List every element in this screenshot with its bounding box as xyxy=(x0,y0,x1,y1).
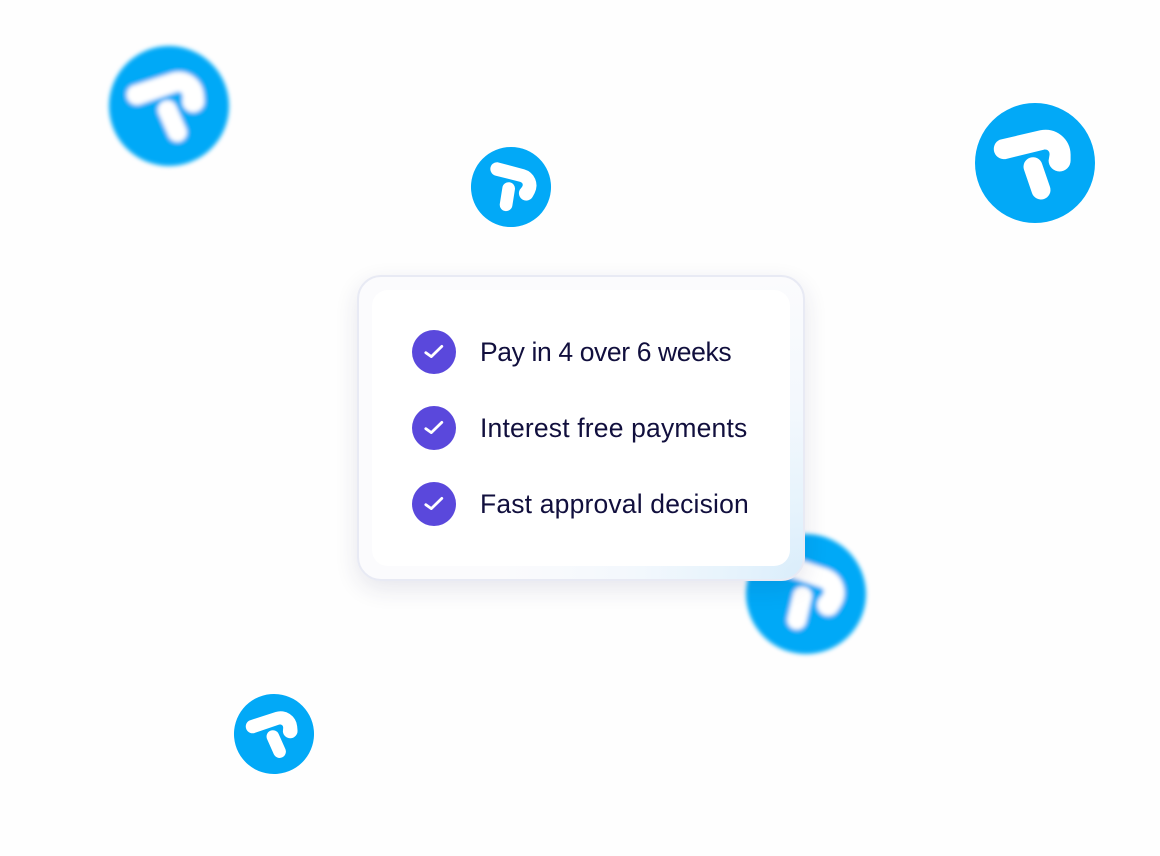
icon: small logo bottom left xyxy=(231,691,317,777)
icon: check badge xyxy=(412,330,456,374)
icon: check badge xyxy=(412,406,456,450)
panel: benefits card xyxy=(357,275,805,581)
icon: sharp logo top right xyxy=(975,103,1095,223)
list item: fast approval xyxy=(412,482,749,526)
list item: fast approval: Fast approval decision xyxy=(480,489,749,519)
icon: small logo top centre xyxy=(457,133,565,241)
list item: pay in 4: Pay in 4 over 6 weeks xyxy=(480,337,731,367)
list item: interest free xyxy=(412,406,747,450)
icon: blurred logo behind card xyxy=(723,511,889,677)
list item: pay in 4 xyxy=(412,330,731,374)
icon: check badge xyxy=(412,482,456,526)
list item: interest free: Interest free payments xyxy=(480,413,747,443)
icon: blurred logo top left xyxy=(104,41,234,171)
